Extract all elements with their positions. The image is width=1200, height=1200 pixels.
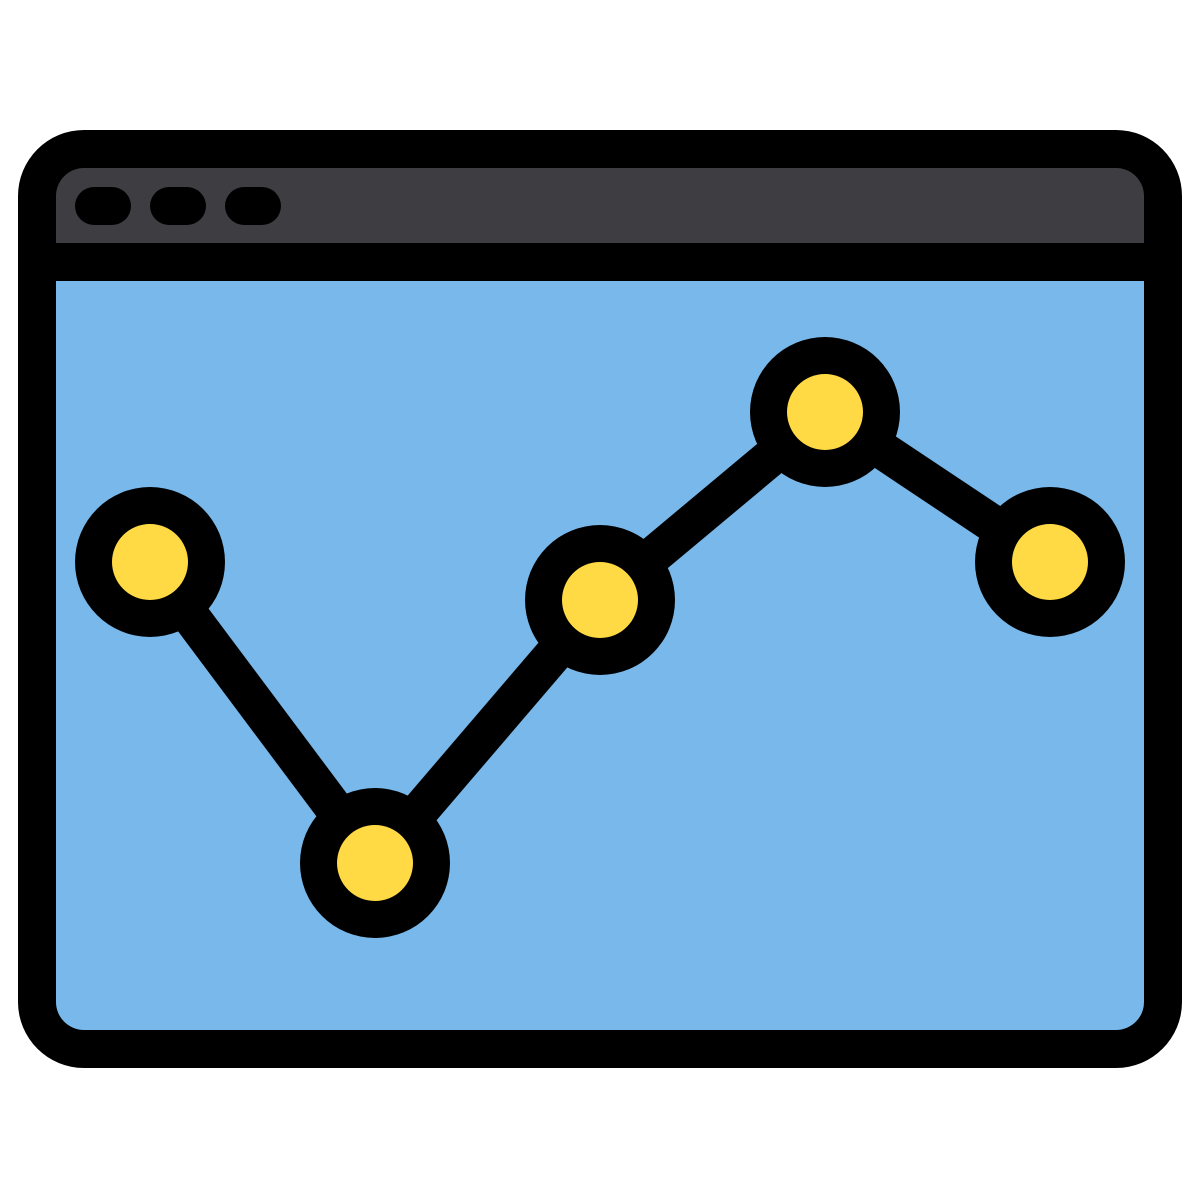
line chart	[75, 337, 1125, 938]
chart area	[56, 281, 1144, 1030]
browser window icon	[18, 130, 1182, 1068]
title bar	[56, 168, 1144, 243]
window buttons	[75, 187, 281, 225]
window frame	[18, 130, 1182, 1068]
